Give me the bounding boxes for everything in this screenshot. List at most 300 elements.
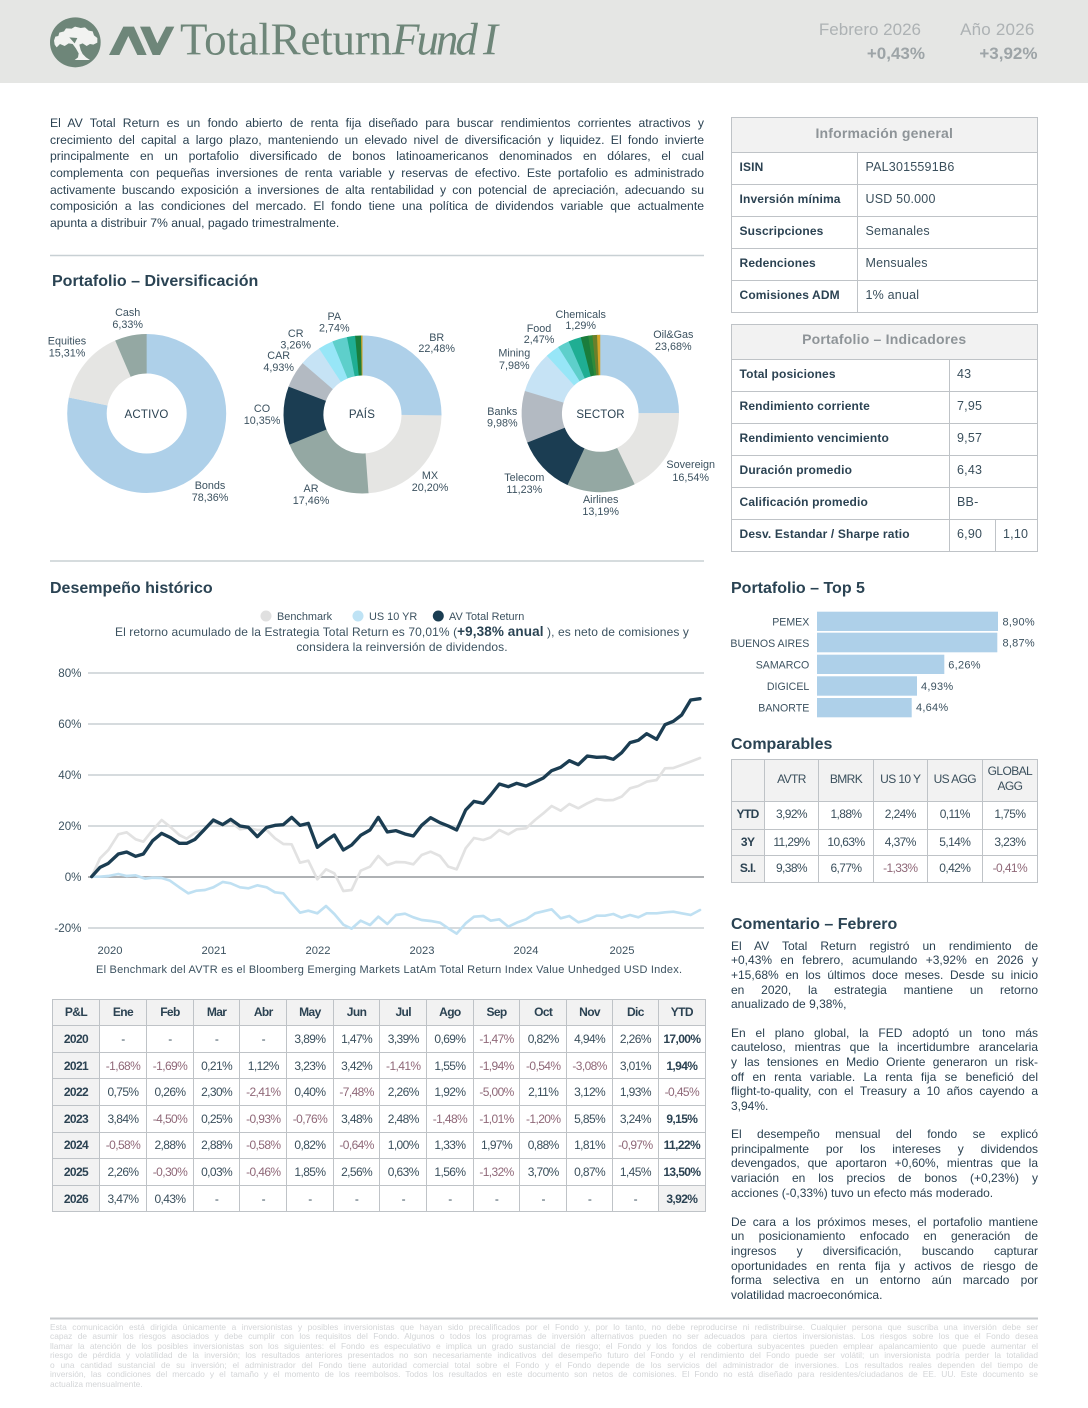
table: P&L mensual: 1,94%: [666, 1059, 697, 1073]
donut chart: sector: 9,98%: [487, 417, 518, 429]
donut chart: sector: 7,98%: [499, 360, 530, 372]
heading: portafolio diversificación: Portafolio – Diversificación: [52, 273, 258, 290]
intro paragraph: El AV Total Return es un fondo abierto de renta fija diseñado para buscar rendimientos corrientes atractivos y: [50, 116, 704, 130]
table: P&L mensual: Ene: [113, 1005, 133, 1019]
table: P&L mensual: 3,12%: [574, 1085, 605, 1099]
donut chart: sector: Telecom: [504, 472, 544, 484]
table: P&L mensual: 2020: [64, 1032, 88, 1046]
header period: año: +3,92%: [979, 44, 1038, 63]
table: P&L mensual: -: [168, 1032, 172, 1046]
bar chart: top 5: 6,26%: [948, 659, 981, 671]
table: información general: [731, 117, 1038, 313]
table: P&L mensual: -: [588, 1192, 591, 1206]
donut chart: sector: Oil&Gas: [653, 329, 694, 341]
table: P&L mensual: 1,81%: [574, 1138, 605, 1152]
y axis labels: 80%: [58, 667, 82, 680]
comment: paragraph 3: El desempeño mensual del fondo se explicó: [731, 1127, 1038, 1141]
donut chart: activo: Bonds: [195, 480, 226, 492]
table: P&L mensual: 17,00%: [663, 1032, 700, 1046]
legal disclaimer: llamar la atención de los posibles inversionistas son los siguientes: el Fondo es especulativo e implica un grado sustancial de riesgo; el Fondo y los fondos de cobertura subyacentes pueden emplear apalancamiento que puede aumentar el: [50, 1341, 1038, 1351]
x axis labels: 2020: [98, 945, 122, 957]
intro paragraph: crecimiento del capital a largo plazo, manteniendo un elevado nivel de diversificación y liquidez. El fondo invierte: [50, 133, 704, 147]
donut chart: activo: Cash: [115, 307, 140, 319]
comment: paragraph 2: cauteloso, mientras que la incertidumbre arancelaria: [731, 1040, 1038, 1054]
donut chart: sector: Mining: [498, 347, 530, 359]
table: P&L mensual: -: [308, 1192, 312, 1206]
table: P&L mensual: -0,45%: [665, 1085, 699, 1099]
bar chart: top 5: 4,93%: [921, 681, 953, 693]
table: P&L mensual: -1,48%: [433, 1112, 467, 1126]
bar chart: top 5: BANORTE: [758, 703, 809, 715]
x axis labels: 2023: [410, 945, 434, 957]
table: P&L mensual: -: [262, 1192, 265, 1206]
bar chart: top 5: DIGICEL: [767, 681, 809, 693]
table: portafolio indicadores: [731, 324, 1038, 552]
table: P&L mensual: 0,43%: [154, 1192, 185, 1206]
chart legend: Benchmark: [277, 611, 333, 623]
comment: paragraph 4: oportunidades en renta fija y activos de riesgo de: [731, 1259, 1038, 1273]
donut chart: activo: ACTIVO: [124, 409, 169, 421]
legal disclaimer: Esta comunicación está dirigida únicamente a inversionistas y posibles inversionistas que hayan sido precalificados por el Fondo y, por lo tanto, no debe reproducirse ni redistribuirse. Cualquier persona que suscriba una inversión debe ser: [50, 1322, 1038, 1332]
donut chart: activo: 78,36%: [192, 492, 229, 504]
x axis labels: [98, 945, 634, 957]
table: P&L mensual: 0,21%: [201, 1059, 232, 1073]
header band: [0, 0, 1088, 83]
table: comparables: [731, 759, 1038, 883]
table: P&L mensual: -: [448, 1192, 452, 1206]
comment: paragraph 2: [731, 1026, 1038, 1113]
table: P&L mensual: YTD: [671, 1005, 693, 1019]
table: comparables: AVTR: [777, 772, 806, 786]
table: comparables: 5,14%: [939, 835, 970, 849]
donut chart: activo: 6,33%: [112, 319, 143, 331]
table: P&L mensual: -: [121, 1032, 125, 1046]
intro paragraph: apunta a distribuir 7% anual, pagado trimestralmente.: [50, 216, 339, 230]
table: comparables: 3,23%: [994, 835, 1025, 849]
comment: paragraph 4: De cara a los próximos meses, el portafolio mantiene: [731, 1215, 1038, 1229]
donut chart: activo: 15,31%: [49, 348, 86, 360]
table: P&L mensual: 3,24%: [620, 1112, 651, 1126]
table: P&L mensual: 0,75%: [107, 1085, 138, 1099]
table: P&L mensual: 3,42%: [341, 1059, 372, 1073]
donut chart: activo: Equities: [48, 335, 87, 347]
table: P&L mensual: 0,88%: [528, 1138, 559, 1152]
donut chart: sector: Food: [527, 323, 551, 335]
donut chart: país: CAR: [267, 350, 290, 362]
table: portafolio indicadores: 6,90: [957, 526, 982, 540]
table: P&L mensual: -0,30%: [153, 1165, 187, 1179]
table: P&L mensual: 2021: [64, 1059, 88, 1073]
table: P&L mensual: 3,89%: [294, 1032, 325, 1046]
comment: paragraph 3: variación en los precios de bonos (+0,23%) y: [731, 1171, 1038, 1185]
comment: paragraph 4: [731, 1215, 1038, 1302]
table: P&L mensual: 1,93%: [620, 1085, 651, 1099]
table: P&L mensual: 0,63%: [388, 1165, 419, 1179]
table: P&L mensual: -1,41%: [386, 1059, 420, 1073]
table: portafolio indicadores: Rendimiento vencimiento: [740, 430, 889, 444]
table: P&L mensual: 11,22%: [664, 1138, 700, 1152]
table: P&L mensual: 3,01%: [620, 1059, 651, 1073]
table: P&L mensual: 13,50%: [663, 1165, 700, 1179]
table: comparables: 6,77%: [830, 861, 862, 875]
table: información general: Semanales: [866, 224, 930, 238]
comment: paragraph 3: acciones (-0,33%) tuvo un efecto más moderado.: [731, 1186, 993, 1200]
table: P&L mensual: 2,48%: [388, 1112, 419, 1126]
logo wordmark: TotalReturn: [180, 14, 392, 64]
comment: paragraph 2: En el plano global, la FED adoptó un tono más: [731, 1026, 1038, 1040]
comment: paragraph 2: off en renta variable. La renta fija se benefició del: [731, 1070, 1038, 1084]
donut chart: activo: [48, 307, 229, 504]
table: P&L mensual: 0,25%: [201, 1112, 232, 1126]
table: información general: Redenciones: [740, 256, 816, 270]
heading: comparables: Comparables: [731, 736, 832, 753]
comment: paragraph 3: principalmente por los intereses y dividendos: [731, 1142, 1038, 1156]
table: portafolio indicadores: BB-: [957, 494, 978, 508]
bar chart: top 5: 8,87%: [1002, 638, 1035, 650]
table: portafolio indicadores: 1,10: [1003, 526, 1028, 540]
table: P&L mensual: 2026: [64, 1192, 88, 1206]
comment: paragraph 3: [731, 1127, 1038, 1200]
table: P&L mensual: -0,54%: [526, 1059, 560, 1073]
comment: paragraph 1: El AV Total Return registró un rendimiento de: [731, 939, 1038, 953]
table: P&L mensual: -0,76%: [293, 1112, 327, 1126]
table: P&L mensual: 1,45%: [620, 1165, 651, 1179]
donut chart: país: 20,20%: [412, 482, 449, 494]
table: comparables: 10,63%: [827, 835, 865, 849]
table: P&L mensual: -0,58%: [246, 1138, 280, 1152]
bar chart: top 5: SAMARCO: [756, 660, 809, 672]
table: P&L mensual: 2,56%: [341, 1165, 372, 1179]
table: P&L mensual: 1,47%: [341, 1032, 372, 1046]
table: información general: Inversión mínima: [740, 192, 841, 206]
table: comparables: 3,92%: [776, 807, 807, 821]
table: P&L mensual: Ago: [439, 1005, 461, 1019]
chart legend: [260, 610, 524, 623]
table: P&L mensual: -0,93%: [246, 1112, 280, 1126]
table: comparables: -0,41%: [993, 861, 1027, 875]
table: comparables: 9,38%: [776, 861, 807, 875]
table: P&L mensual: 0,03%: [201, 1165, 232, 1179]
table: P&L mensual: -1,32%: [479, 1165, 514, 1179]
donut chart: sector: Airlines: [583, 494, 619, 506]
header period: febrero: [819, 20, 925, 63]
table: P&L mensual: -: [215, 1032, 218, 1046]
table: comparables: US AGG: [934, 772, 976, 786]
donut chart: país: 22,48%: [418, 343, 455, 355]
donut chart: país: [244, 311, 455, 507]
header period: año: [960, 20, 1038, 63]
table: P&L mensual: 3,84%: [107, 1112, 138, 1126]
table: P&L mensual: -7,48%: [339, 1085, 374, 1099]
table: P&L mensual: 0,82%: [528, 1032, 559, 1046]
table: comparables: 1,88%: [830, 807, 862, 821]
table: P&L mensual: 0,26%: [154, 1085, 185, 1099]
header period: febrero: Febrero 2026: [819, 20, 921, 39]
table: P&L mensual: 3,92%: [666, 1192, 697, 1206]
chart legend: AV Total Return: [449, 611, 524, 623]
intro paragraph: [50, 116, 704, 230]
donut chart: sector: 16,54%: [672, 472, 709, 484]
comment: paragraph 3: devengados, que aportaron +0,60%, mientras que la: [731, 1156, 1038, 1170]
table: portafolio indicadores: 43: [957, 366, 971, 380]
logo: [50, 14, 500, 67]
chart caption: [115, 624, 689, 654]
table: P&L mensual: Oct: [534, 1005, 552, 1019]
donut chart: país: 3,26%: [280, 339, 311, 351]
donut chart: sector: 11,23%: [506, 484, 543, 496]
table: P&L mensual: 0,87%: [574, 1165, 605, 1179]
donut chart: sector: 2,47%: [524, 334, 555, 346]
table: P&L mensual: -1,47%: [479, 1032, 514, 1046]
table: P&L mensual: 3,47%: [107, 1192, 138, 1206]
chart legend: US 10 YR: [369, 611, 417, 623]
table: comparables: YTD: [737, 807, 759, 821]
comment: paragraph 2: y las tensiones en Medio Oriente generaron un risk-: [731, 1055, 1038, 1069]
table: P&L mensual: -0,64%: [339, 1138, 374, 1152]
table: portafolio indicadores: 6,43: [957, 462, 982, 476]
table: P&L mensual: 1,55%: [434, 1059, 465, 1073]
intro paragraph: composición a las condiciones del mercado. El fondo tiene una política de dividendos variable que actualmente: [50, 199, 704, 213]
donut chart: país: PAÍS: [349, 408, 375, 421]
table: P&L mensual: Sep: [486, 1005, 507, 1019]
comment: paragraph 4: ingresos y diversificación, buscando capturar: [731, 1244, 1038, 1258]
table: P&L mensual: 1,00%: [388, 1138, 419, 1152]
comment: paragraph 1: anualizado de 9,38%,: [731, 997, 846, 1011]
table: P&L mensual: -: [634, 1192, 637, 1206]
table: P&L mensual: 2,26%: [620, 1032, 651, 1046]
table: P&L mensual: Dic: [627, 1005, 644, 1019]
table: portafolio indicadores: Total posiciones: [740, 366, 836, 380]
table: P&L mensual: 2,88%: [154, 1138, 185, 1152]
table: P&L mensual: 0,40%: [294, 1085, 325, 1099]
table: P&L mensual: Nov: [579, 1005, 600, 1019]
table: comparables: GLOBAL AGG: [988, 764, 1032, 793]
intro paragraph: complementa con pequeñas inversiones de renta variable y reservas de efectivo. Este portafolio es administrado: [50, 166, 704, 180]
table: comparables: 11,29%: [773, 835, 810, 849]
table: P&L mensual: -1,20%: [526, 1112, 560, 1126]
bar chart: top 5: 8,90%: [1002, 616, 1035, 628]
y axis labels: 20%: [58, 820, 82, 833]
table: P&L mensual: 3,23%: [294, 1059, 325, 1073]
table: P&L mensual: 2,26%: [388, 1085, 419, 1099]
table: P&L mensual: 3,48%: [341, 1112, 372, 1126]
icon: tree in circle: [50, 17, 101, 67]
table: portafolio indicadores: Duración promedio: [740, 462, 852, 476]
table: P&L mensual: May: [299, 1005, 321, 1019]
legal disclaimer: riesgo de pérdida y volatilidad de la inversión; los resultados anteriores presentados no son necesariamente indicativos del desempeño futuro del Fondo y el rendimiento del Fondo puede ser volátil; un inversionista podría perder la totalidad: [50, 1350, 1038, 1360]
donut chart: sector: 13,19%: [582, 506, 619, 518]
table: portafolio indicadores: 9,57: [957, 430, 982, 444]
table: P&L mensual: Mar: [207, 1005, 226, 1019]
legal disclaimer: capaz de asumir los riesgos asociados y debe cumplir con los requisitos del Fondo. Algunos o todos los programas de inversión alternativos pueden no ser adecuados para ciertos inversionistas. Los riesgos sobre los que el Fondo desea: [50, 1331, 1038, 1341]
donut chart: país: CO: [254, 403, 270, 415]
table: P&L mensual: -1,01%: [479, 1112, 514, 1126]
table: portafolio indicadores: Rendimiento corriente: [740, 398, 870, 412]
x axis labels: 2025: [610, 945, 634, 957]
table: información general: Suscripciones: [740, 224, 823, 238]
table: información general: Comisiones ADM: [740, 288, 840, 302]
table: portafolio indicadores: Portafolio – Indicadores: [802, 331, 966, 347]
table: P&L mensual: 1,12%: [248, 1059, 279, 1073]
table: P&L mensual: 2022: [64, 1085, 88, 1099]
comment: paragraph 4: forma selectiva en un entorno aún marcado por: [731, 1273, 1038, 1287]
table: P&L mensual: 2,11%: [528, 1085, 558, 1099]
line series: [92, 699, 700, 934]
table: P&L mensual: [52, 999, 706, 1212]
table: P&L mensual: 2,26%: [107, 1165, 138, 1179]
table: P&L mensual: 0,69%: [434, 1032, 465, 1046]
table: comparables: 3Y: [741, 835, 754, 849]
table: P&L mensual: Jun: [347, 1005, 366, 1019]
logo wordmark: Fund I: [391, 14, 500, 64]
table: información general: 1% anual: [866, 288, 919, 302]
comment: paragraph 2: 3,94%.: [731, 1099, 768, 1113]
table: P&L mensual: -5,00%: [479, 1085, 514, 1099]
table: P&L mensual: 1,33%: [434, 1138, 465, 1152]
x axis labels: 2022: [306, 945, 330, 957]
table: comparables: S.I.: [740, 861, 755, 875]
heading: top 5: Portafolio – Top 5: [731, 580, 865, 597]
table: P&L mensual: Abr: [254, 1005, 273, 1019]
table: portafolio indicadores: 7,95: [957, 398, 982, 412]
comment: paragraph 1: [731, 939, 1038, 1011]
icon: AV monogram: [109, 27, 174, 55]
table: comparables: US 10 Y: [880, 772, 920, 786]
donut chart: país: 4,93%: [263, 362, 294, 374]
comment: paragraph 4: volatilidad macroeconómica.: [731, 1288, 882, 1302]
heading: desempeño histórico: Desempeño histórico: [50, 580, 213, 597]
legal disclaimer: actualiza mensualmente.: [50, 1379, 143, 1389]
table: información general: Información general: [815, 124, 953, 140]
divider lines: [50, 256, 1038, 1318]
table: P&L mensual: -: [355, 1192, 358, 1206]
donut chart: sector: [487, 309, 715, 518]
table: P&L mensual: 3,70%: [528, 1165, 559, 1179]
table: P&L mensual: 4,94%: [574, 1032, 605, 1046]
table: P&L mensual: -3,08%: [572, 1059, 607, 1073]
table: P&L mensual: -: [495, 1192, 498, 1206]
table: P&L mensual: 1,97%: [481, 1138, 512, 1152]
table: P&L mensual: 9,15%: [666, 1112, 697, 1126]
y axis labels: 0%: [65, 871, 82, 884]
chart note: El Benchmark del AVTR es el Bloomberg Emerging Markets LatAm Total Return Index Value Unhedged USD Index.: [96, 964, 682, 976]
intro paragraph: activamente buscando exposición a inversiones de alta rentabilidad y con potencial de apreciación, adecuando su: [50, 182, 704, 196]
y axis labels: 40%: [58, 769, 82, 782]
table: P&L mensual: 2,88%: [201, 1138, 232, 1152]
x axis labels: 2021: [202, 945, 226, 957]
comment: paragraph 1: +15,68% en los últimos doce meses. Desde su inicio: [731, 968, 1038, 982]
chart caption: considera la reinversión de dividendos.: [296, 640, 508, 654]
table: P&L mensual: -: [542, 1192, 545, 1206]
legal disclaimer: o una cantidad sustancial de su inversión; el administrador del Fondo tiene autoridad comercial total sobre el Fondo y el Fondo depende de los servicios del administrador de inversiones. Los resultados reales dependen del tiempo de: [50, 1360, 1038, 1370]
table: P&L mensual: -1,69%: [153, 1059, 187, 1073]
donut chart: sector: Chemicals: [555, 309, 606, 321]
y axis labels: 60%: [58, 718, 82, 731]
header period: febrero: +0,43%: [867, 44, 925, 63]
x axis labels: 2024: [514, 945, 538, 957]
bar chart: top 5: [730, 612, 1035, 717]
donut chart: país: 10,35%: [244, 415, 281, 427]
table: comparables: 0,11%: [940, 807, 970, 821]
table: portafolio indicadores: Calificación promedio: [740, 494, 868, 508]
comment: paragraph 2: flight-to-quality, con el Treasury a 10 años cayendo a: [731, 1084, 1038, 1098]
comment: paragraph 1: en 2020, la estrategia mantiene un retorno: [731, 983, 1038, 997]
table: P&L mensual: 1,85%: [294, 1165, 325, 1179]
table: información general: PAL3015591B6: [866, 160, 955, 174]
table: P&L mensual: -0,97%: [618, 1138, 653, 1152]
donut chart: sector: 1,29%: [565, 320, 596, 332]
table: P&L mensual: 1,56%: [434, 1165, 465, 1179]
intro paragraph: principalmente en un portafolio diversificado de bonos latinoamericanos denominados en dólares, el cual: [50, 149, 704, 163]
donut chart: país: PA: [327, 311, 342, 323]
donut chart: sector: SECTOR: [576, 409, 625, 421]
table: comparables: 4,37%: [885, 835, 916, 849]
table: P&L mensual: -1,94%: [479, 1059, 514, 1073]
legal disclaimer: [50, 1322, 1038, 1389]
donut chart: país: AR: [304, 483, 319, 495]
table: comparables: BMRK: [830, 772, 862, 786]
table: información general: USD 50.000: [866, 192, 936, 206]
heading: comentario: Comentario – Febrero: [731, 916, 897, 933]
donut chart: país: 2,74%: [319, 322, 350, 334]
table: P&L mensual: Feb: [160, 1005, 180, 1019]
table: información general: Mensuales: [866, 256, 928, 270]
table: comparables: 0,42%: [939, 861, 970, 875]
chart caption: El retorno acumulado de la Estrategia Total Return es 70,01% (+9,38% anual ), es neto de comisiones y: [115, 624, 689, 639]
bar chart: top 5: 4,64%: [916, 702, 948, 714]
donut chart: país: BR: [429, 332, 444, 344]
bar chart: top 5: BUENOS AIRES: [730, 638, 809, 650]
table: P&L mensual: 2023: [64, 1112, 88, 1126]
table: P&L mensual: 2,30%: [201, 1085, 232, 1099]
table: P&L mensual: P&L: [65, 1005, 87, 1019]
donut chart: sector: Sovereign: [666, 459, 715, 471]
header period: año: Año 2026: [960, 20, 1034, 39]
donut chart: país: MX: [422, 470, 438, 482]
table: P&L mensual: -1,68%: [106, 1059, 140, 1073]
table: P&L mensual: 1,92%: [434, 1085, 465, 1099]
table: P&L mensual: 2025: [64, 1165, 88, 1179]
table: P&L mensual: -2,41%: [246, 1085, 280, 1099]
table: P&L mensual: 5,85%: [574, 1112, 605, 1126]
line chart: desempeño histórico: [54, 667, 704, 957]
table: P&L mensual: -: [402, 1192, 405, 1206]
y axis labels: -20%: [54, 922, 82, 935]
table: P&L mensual: Jul: [395, 1005, 411, 1019]
bar chart: top 5: PEMEX: [772, 616, 809, 628]
comment: paragraph 1: +0,43% en febrero, acumulando +3,92% en 2026 y: [731, 953, 1038, 967]
y axis labels: [54, 667, 82, 935]
donut chart: sector: Banks: [487, 406, 518, 418]
table: comparables: -1,33%: [883, 861, 917, 875]
table: P&L mensual: 2024: [64, 1138, 88, 1152]
donut chart: sector: 23,68%: [655, 341, 692, 353]
donut chart: país: 17,46%: [293, 495, 330, 507]
legal disclaimer: inversión, las condiciones del mercado y el tamaño y el momento de los reembolsos. Todos los resultados en este documento son netos de comisiones. El Fondo no está diseñado para residentes/ciudadanos de EE. UU. Este documento se: [50, 1369, 1038, 1379]
table: comparables: 2,24%: [885, 807, 916, 821]
table: P&L mensual: -0,58%: [106, 1138, 140, 1152]
table: comparables: 1,75%: [994, 807, 1025, 821]
table: P&L mensual: -: [262, 1032, 265, 1046]
table: información general: ISIN: [740, 160, 763, 174]
table: P&L mensual: 0,82%: [294, 1138, 325, 1152]
table: P&L mensual: 3,39%: [388, 1032, 419, 1046]
comment: paragraph 4: un posicionamiento enfocado en generación de: [731, 1229, 1038, 1243]
donut chart: país: CR: [288, 328, 304, 340]
table: P&L mensual: -4,50%: [153, 1112, 187, 1126]
table: P&L mensual: -: [215, 1192, 218, 1206]
table: P&L mensual: -0,46%: [246, 1165, 280, 1179]
